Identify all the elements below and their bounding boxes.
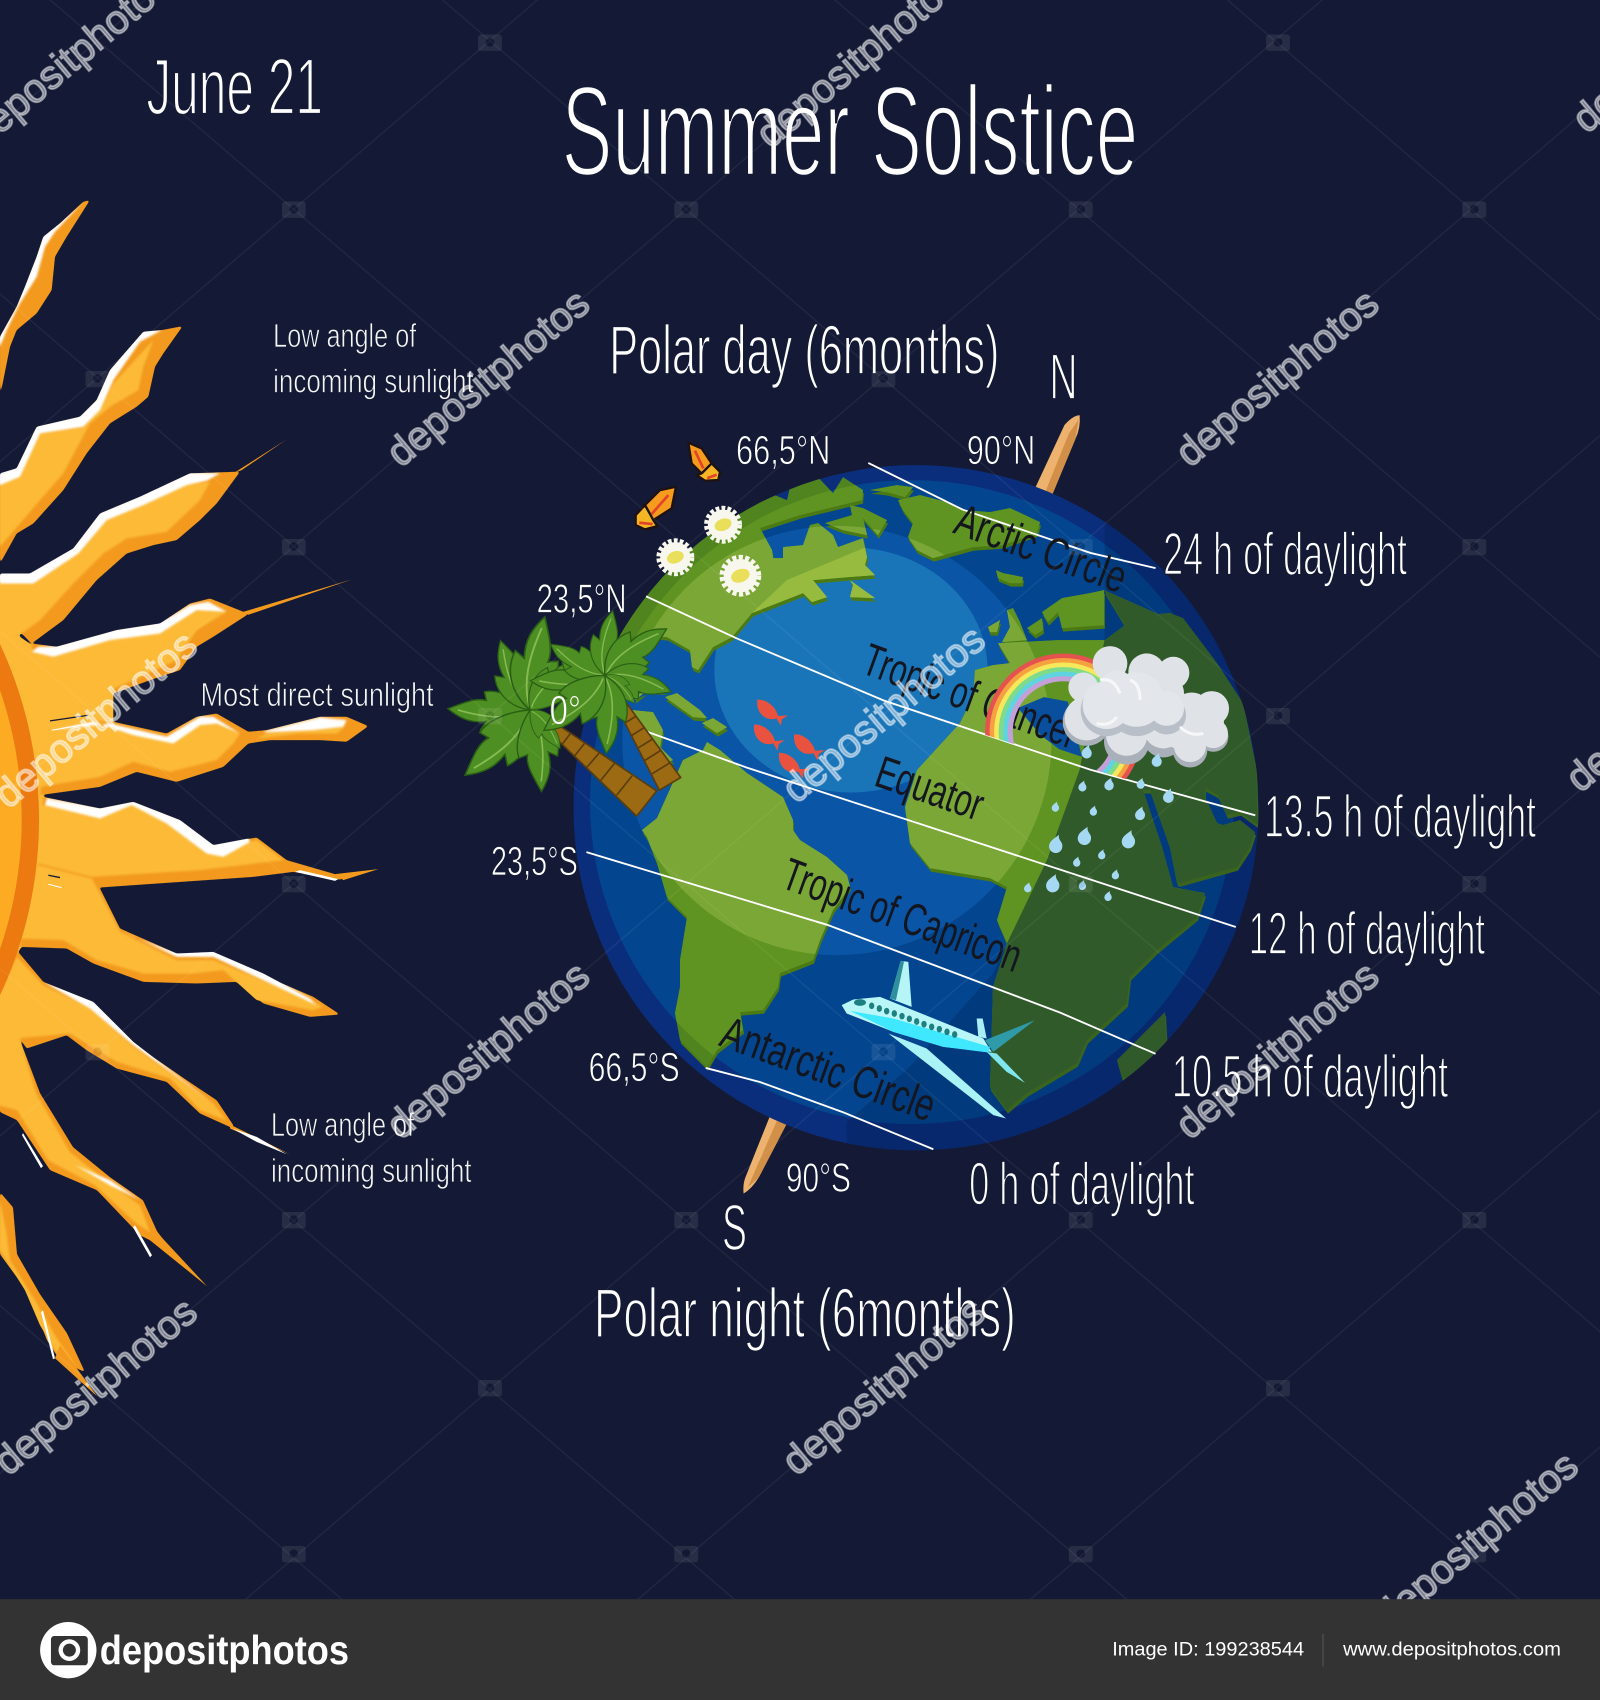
watermarks: depositphotos xyxy=(1167,953,1387,1148)
ray 3 xyxy=(0,472,240,643)
ray 2 xyxy=(0,326,183,563)
icon: raindrops xyxy=(1024,745,1174,901)
label: low angle of incoming sunlight (bottom): incoming sunlight xyxy=(271,1153,472,1190)
label: 66,5°N: 66,5°N xyxy=(736,427,830,473)
illustration: sun xyxy=(0,200,378,1396)
label: low angle of incoming sunlight (bottom) xyxy=(271,1107,472,1190)
illustration: palm trees xyxy=(448,609,681,816)
label: antarctic circle: Antarctic Circle xyxy=(714,1007,942,1131)
illustration: globe xyxy=(574,465,1258,1150)
label: low angle of incoming sunlight (top): Low angle of xyxy=(273,318,417,355)
label: tropic of capricorn: Tropic of Capricon xyxy=(776,848,1029,982)
heading: south pole S: S xyxy=(722,1191,747,1264)
icon: fish school xyxy=(749,699,827,780)
footer url: www.depositphotos.com xyxy=(1342,1639,1561,1661)
label: 23,5°N: 23,5°N xyxy=(537,576,627,622)
icon: airplane xyxy=(842,961,1035,1119)
ray 1 xyxy=(0,200,90,397)
ray 8 xyxy=(0,950,233,1129)
label: 0°: 0° xyxy=(550,687,581,733)
icon: butterflies xyxy=(636,443,720,529)
label: low angle of incoming sunlight (top) xyxy=(273,318,474,400)
label: 90°S: 90°S xyxy=(786,1155,851,1201)
watermarks: depositphotos xyxy=(378,281,598,475)
label: tropic of cancer: Tropic of Cancer xyxy=(856,634,1086,759)
watermarks: depositphotos xyxy=(1367,1443,1587,1638)
icon: earth axis xyxy=(743,415,1080,1194)
watermarks: depositphotos xyxy=(774,617,994,811)
line: tropic of cancer xyxy=(646,596,1255,815)
heading: north pole N: N xyxy=(1049,340,1078,413)
line: equator xyxy=(638,729,1236,927)
icon: rain cloud xyxy=(1063,646,1229,767)
label: 66,5°S: 66,5°S xyxy=(589,1044,680,1090)
footer logo icon xyxy=(40,1622,96,1678)
label: low angle of incoming sunlight (bottom): Low angle of xyxy=(271,1107,415,1144)
heading: polar night: Polar night (6months) xyxy=(594,1274,1016,1352)
continents xyxy=(618,477,1258,1150)
title: June 21: June 21 xyxy=(146,41,323,131)
ray 4 xyxy=(32,598,248,713)
label: 0 h of daylight: 0 h of daylight xyxy=(969,1150,1195,1218)
line: tropic of capricorn xyxy=(586,852,1156,1054)
footer logo text: depositphotos xyxy=(100,1627,349,1673)
watermark camera icons xyxy=(86,35,1486,1562)
watermarks: depositphotos xyxy=(1167,281,1387,475)
ray 9 xyxy=(0,1040,170,1248)
label: low angle of incoming sunlight (top): incoming sunlight xyxy=(273,363,474,400)
ray 6 xyxy=(38,797,343,888)
watermarks: depositphotos xyxy=(378,953,598,1148)
line: antarctic circle xyxy=(706,1068,933,1149)
ray 5 xyxy=(40,713,368,795)
sun ray wisps xyxy=(230,439,378,1154)
label: 23,5°S: 23,5°S xyxy=(491,838,578,884)
label: most direct sunlight: Most direct sunlight xyxy=(201,677,434,714)
icon: daisies xyxy=(659,508,759,594)
label: 24 h of daylight: 24 h of daylight xyxy=(1163,520,1407,588)
label: arctic circle: Arctic Circle xyxy=(948,494,1134,603)
label: 90°N: 90°N xyxy=(967,427,1035,473)
label: equator: Equator xyxy=(869,746,991,830)
line: arctic circle xyxy=(868,463,1156,568)
heading: polar day: Polar day (6months) xyxy=(609,311,999,389)
footer image id: Image ID: 199238544 xyxy=(1112,1639,1304,1661)
ray 10 xyxy=(0,1192,85,1372)
ray 7 xyxy=(20,863,340,1017)
icon: rainbow xyxy=(985,654,1136,780)
footer band xyxy=(0,1599,1600,1700)
title: Summer Solstice: Summer Solstice xyxy=(562,61,1138,204)
watermarks: depositphotos xyxy=(774,1289,994,1484)
